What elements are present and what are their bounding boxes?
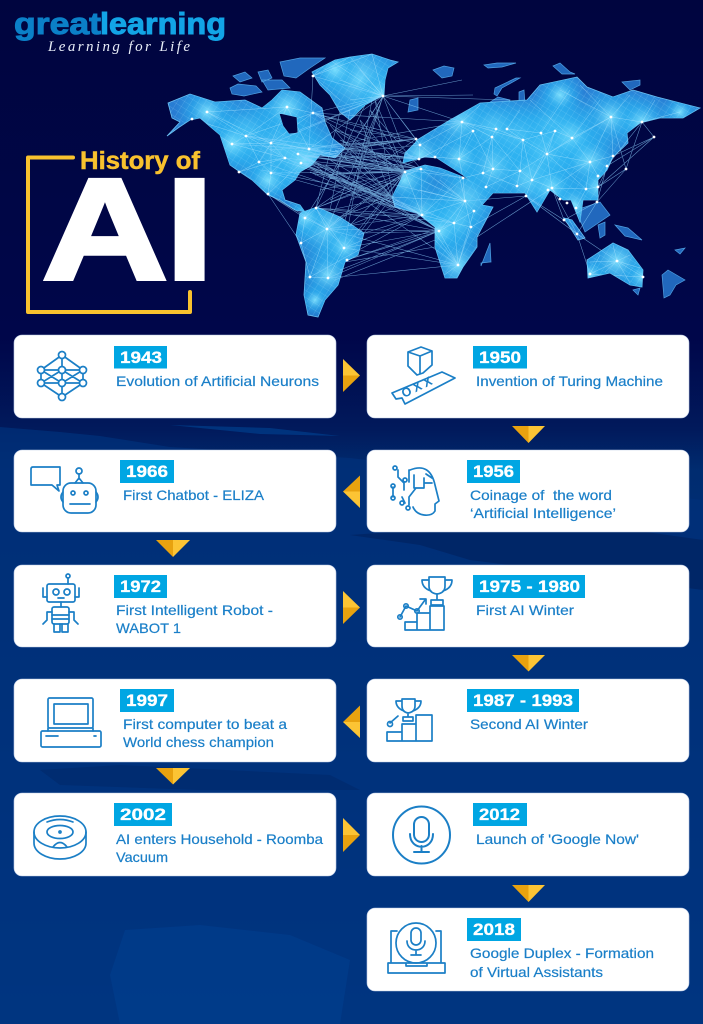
arrow: 1956 to 1966 (343, 476, 360, 508)
card: 1987 - 1993 (367, 679, 689, 762)
world network map (167, 25, 700, 318)
year: 1975 - 1980 (473, 575, 585, 598)
icon: trophy podium (387, 699, 432, 741)
text: ‘Artificial Intelligence’ (470, 505, 616, 521)
icon: roomba (34, 816, 86, 859)
icon: chatbot (31, 467, 98, 513)
year: 1966: 1966 (126, 462, 168, 481)
arrow: 2012 to 2018 (512, 885, 545, 902)
icon: voice laptop (388, 923, 445, 973)
year: 1950: 1950 (479, 348, 521, 367)
icon: robot (43, 574, 79, 632)
text: Vacuum (116, 849, 168, 865)
title: History of: History of (80, 147, 201, 175)
logo: learning (100, 6, 226, 41)
year: 1987 - 1993 (467, 689, 579, 712)
logo (14, 6, 226, 55)
arrow: 1943 to 1950 (343, 359, 360, 392)
text (123, 716, 287, 750)
year: 2012 (473, 803, 527, 826)
text: First Intelligent Robot - (116, 602, 273, 618)
card: 2018 (367, 908, 689, 991)
icon: computer (41, 698, 101, 747)
logo: great (14, 6, 101, 41)
map: islands (230, 58, 685, 298)
year: 1950 (473, 346, 527, 368)
icon: microphone (393, 806, 450, 864)
title: History of AI (28, 147, 214, 312)
title: AI: AI (42, 148, 214, 310)
year: 1997: 1997 (126, 691, 168, 710)
year: 1972: 1972 (120, 577, 161, 596)
logo: Learning for Life (47, 39, 190, 55)
card: 2012 (367, 793, 689, 876)
text: First AI Winter (476, 602, 574, 618)
text: of Virtual Assistants (470, 964, 603, 980)
icon: Turing machine (392, 347, 455, 404)
icon: trophy and steps (398, 577, 452, 630)
year: 1956: 1956 (473, 462, 514, 481)
year: 1943 (114, 346, 167, 368)
map: glow (180, 54, 697, 316)
arrow: 2002 to 2012 (343, 818, 360, 852)
card: 1956 (367, 450, 689, 532)
card: 1997 (14, 679, 336, 762)
year: 1943: 1943 (120, 348, 162, 367)
text (470, 945, 654, 980)
year: 1956 (467, 460, 520, 483)
year: 1972 (114, 575, 167, 598)
text: Google Duplex - Formation (470, 945, 654, 961)
card: 1972 (14, 565, 336, 647)
card: 1943 (14, 335, 336, 418)
arrow: 1997 to 2002 (156, 768, 190, 784)
map: land (167, 54, 700, 317)
icon: neural network (38, 352, 86, 400)
year: 2018 (467, 918, 521, 941)
text (116, 602, 273, 636)
arrow: 1987 to 1997 (343, 706, 360, 738)
year: 2002: 2002 (120, 805, 166, 824)
text (470, 487, 616, 521)
icon: Turing machine: OXX (399, 373, 437, 401)
text: World chess champion (123, 734, 274, 750)
year: 1975 - 1980: 1975 - 1980 (479, 577, 580, 596)
arrow: 1975 to 1987 (512, 655, 545, 672)
year: 1966 (120, 460, 174, 483)
year: 2002 (114, 803, 172, 826)
text: Evolution of Artificial Neurons (116, 373, 319, 389)
card: 2002 (14, 793, 336, 876)
text (116, 831, 323, 865)
text: First computer to beat a (123, 716, 287, 732)
card: 1975 - 1980 (367, 565, 689, 647)
arrow: 1966 to 1972 (156, 540, 190, 557)
map: network lines (232, 76, 654, 280)
text: Coinage of the word (470, 487, 612, 503)
year: 2018: 2018 (473, 920, 515, 939)
map: mesh texture (167, 54, 700, 317)
year: 2012: 2012 (479, 805, 520, 824)
map: nodes (191, 75, 655, 279)
text: Launch of 'Google Now' (476, 831, 639, 847)
year: 1987 - 1993: 1987 - 1993 (473, 691, 573, 710)
text: First Chatbot - ELIZA (123, 487, 265, 503)
icon: AI head (391, 466, 439, 515)
year: 1997 (120, 689, 174, 712)
card: 1966 (14, 450, 336, 532)
title bracket (28, 158, 190, 312)
text: Second AI Winter (470, 716, 588, 732)
arrow: 1972 to 1975 (343, 591, 360, 624)
text: WABOT 1 (116, 620, 181, 636)
text: Invention of Turing Machine (476, 373, 663, 389)
card: 1950 (367, 335, 689, 418)
arrow: 1950 to 1956 (512, 426, 545, 443)
text: AI enters Household - Roomba (116, 831, 323, 847)
